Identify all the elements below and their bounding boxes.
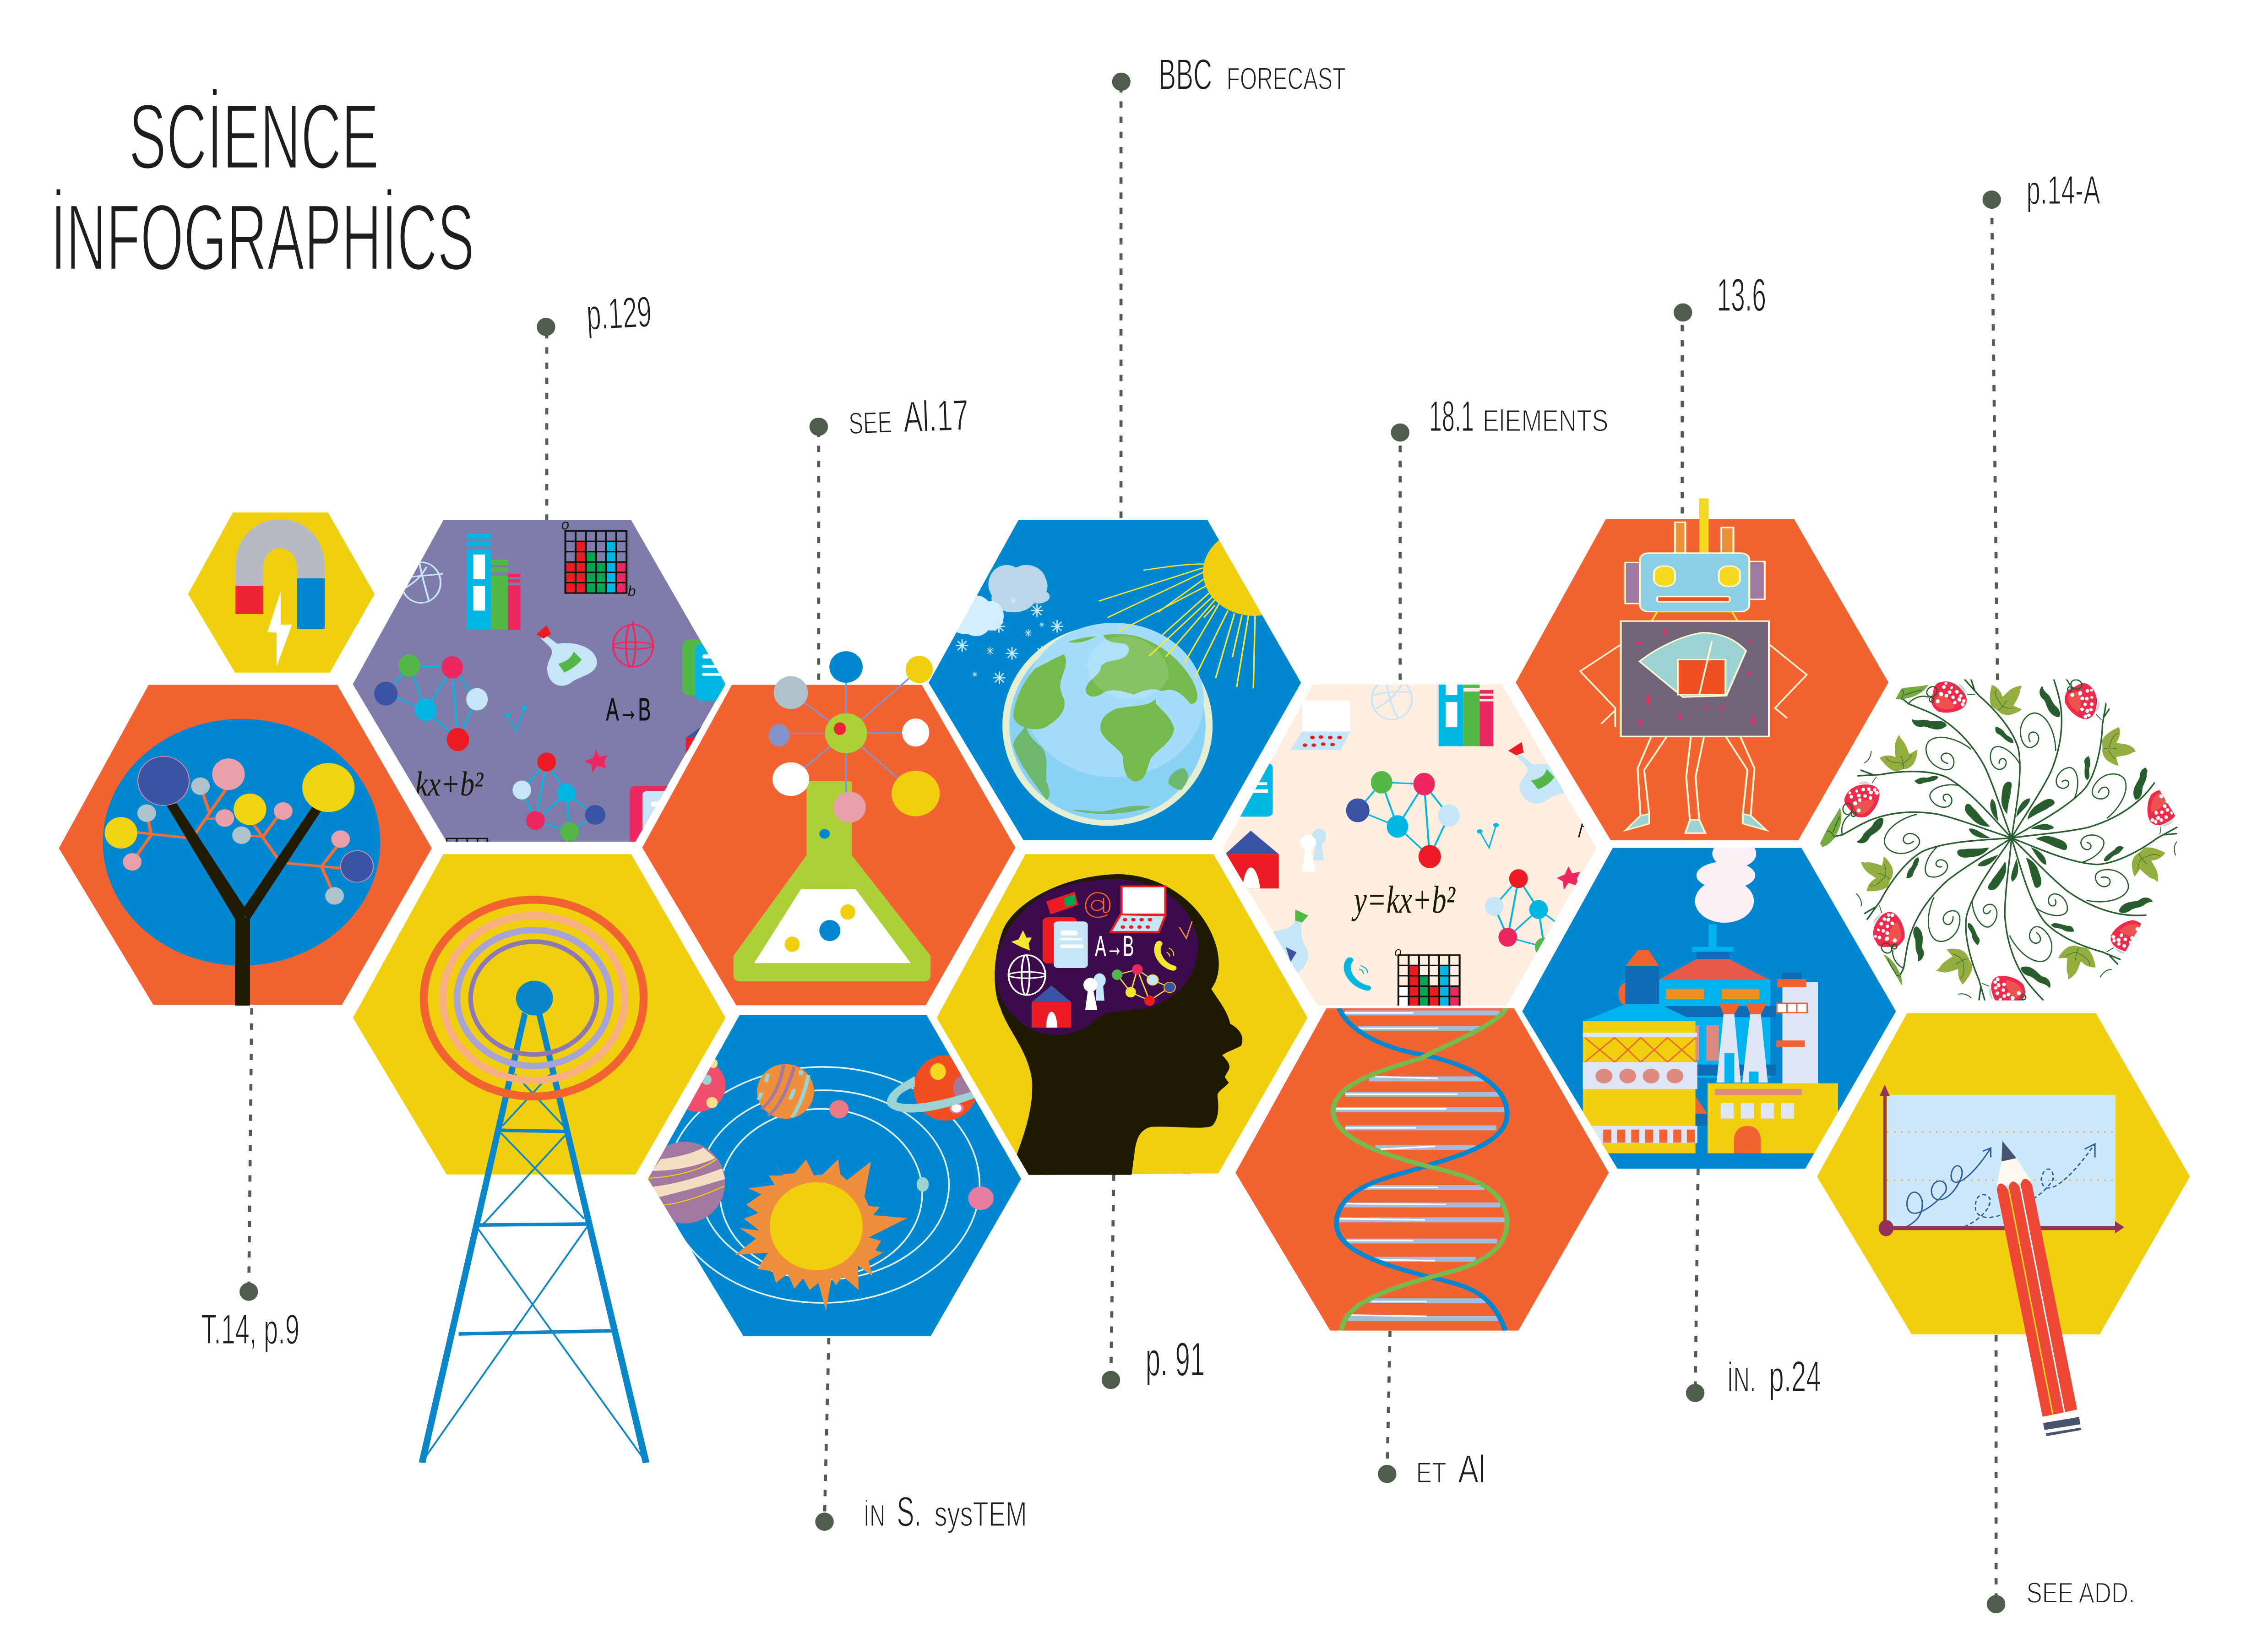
icon: small V [505,706,527,731]
icon: flask right [1508,742,1573,804]
callout: see al.17: Al.17 [903,391,969,441]
factory chimneys [1717,1003,1768,1083]
chart icon: grid [1398,955,1460,1006]
icon: V [1477,823,1499,848]
callout: et al [1378,1331,1485,1491]
chart curve dashed [1964,1144,2095,1227]
panel: magnet hexagon [188,512,375,673]
factory main building [1659,959,1776,1077]
callout: in. p.24: p.24 [1769,1353,1821,1401]
DNA rungs [1336,1013,1505,1318]
callout: in S. system: İN [864,1499,885,1533]
callout: in S. system: sysTEM [935,1495,1027,1534]
callout: see al.17: SEE [848,405,892,441]
icon: clouds [952,565,1050,636]
icon: tile green and cyan [682,639,737,701]
panel: tower hexagon [353,854,725,1463]
callout: 18.1 elements: 18.1 [1429,392,1474,441]
icon: light globe [401,562,443,603]
callout: et al: ET [1416,1457,1447,1489]
text: equation: y=kx+b² [1351,878,1456,921]
callout: BBC forecast: BBC [1158,50,1212,99]
callout: 18.1 elements [1391,392,1609,680]
panel: solar system hexagon [645,1015,1021,1336]
icon: phone [1158,943,1174,968]
icon: flask [536,625,597,686]
robot feet [1626,814,1767,833]
robot legs [1637,737,1754,821]
icon: small planets [829,1100,994,1210]
text: grid letters [561,516,636,599]
icon: globe [1008,955,1045,995]
icon: molecule [374,654,488,751]
callout: p. 91 [1102,1175,1205,1389]
factory left tower [1583,950,1696,1021]
fragment stroke [1579,823,1589,838]
icon: pencil [1997,1141,2081,1436]
panel: cream hexagon [1223,679,1597,1006]
fruit circles [105,756,373,904]
icon: chimney stack [1692,925,1733,963]
callout: in S. system [815,1338,1027,1535]
icon: V [1180,921,1192,938]
chart gridlines [1887,1132,2114,1180]
icon: atom links [779,667,919,807]
panel: purple formulas hexagon [353,516,737,845]
factory yellow block [1583,1021,1697,1153]
brain [996,879,1198,1035]
icon: star [1557,866,1580,890]
icon: earth [1006,623,1209,823]
callout: BBC forecast [1112,50,1346,518]
icon: tower head [516,981,553,1015]
icon: molecule second [512,752,605,841]
callout: p. 91: p. 91 [1146,1333,1205,1386]
icon: banded planet [645,1142,725,1224]
icon: flask lower [1273,909,1308,974]
icon: star [584,749,607,773]
callout: BBC forecast: FORECAST [1227,62,1346,96]
icon: sun [735,1159,908,1311]
callout: 18.1 elements: ElEMENTS [1483,404,1609,438]
text: letter o: o [1394,943,1402,959]
robot body [1621,621,1769,736]
icon: books [467,533,521,630]
icon: notes tile [1228,763,1273,816]
icon: laptop [1110,887,1165,932]
chart curve solid [1901,1148,1991,1229]
panel: head hexagon [937,854,1308,1175]
callout: p.14-A [1982,167,2100,680]
icon: radio tower [419,1012,649,1463]
panel: factory hexagon [1522,839,1896,1169]
orbits [666,1067,979,1303]
panel: chart hexagon [1817,1013,2190,1436]
bottom grid piece [446,838,487,842]
title: İNFOGRAPHİCS [51,185,474,290]
chart axes [1879,1085,2124,1236]
icon: at sign [1086,892,1110,917]
icon: lightning [267,591,292,667]
factory small annex [1696,1096,1707,1126]
icon: house piece [686,721,709,759]
factory front block [1708,1083,1838,1153]
robot head [1640,553,1749,612]
title: SCİENCE [129,85,379,188]
title [51,85,474,290]
text: A to B white: A→B [1095,930,1134,962]
panel: strawberry vines hexagon [1811,624,2229,1048]
icon: molecule second [1485,869,1568,957]
icon: snowflakes [956,596,1063,684]
callout: in. p.24 [1686,1169,1821,1402]
icon: phone [1347,960,1368,988]
icon: globe [1372,679,1412,719]
callout: p.129: p.129 [585,288,653,339]
icon: keyholes [1083,973,1106,1010]
text: grid letters: o [561,516,569,533]
tree trunk [166,803,321,1006]
DNA highlights [1336,1013,1458,1317]
callout: 13.6: 13.6 [1717,269,1766,321]
green strand [1333,1008,1507,1331]
icon: keyholes [1300,829,1326,872]
icon: molecule [1112,964,1175,1006]
icon: sun [1203,528,1305,616]
robot arms [1580,645,1807,727]
icon: house [1225,831,1279,888]
callout: 13.6 [1674,269,1766,513]
icon: phone tile [630,786,689,845]
icon: pink globe [613,621,653,667]
callout: p.129 [537,288,653,521]
callout: p.14-A: p.14-A [2026,167,2100,212]
callout: T.14, p.9 [201,1008,299,1353]
robot ears [1625,561,1765,604]
chart icon: grid [566,531,626,593]
chart arrow tip [2085,1144,2095,1157]
text: formula: kx+b² [415,765,484,803]
icon: notes tile [1043,917,1088,968]
panel: earth hexagon [929,520,1305,840]
callout: T.14, p.9: T.14, p.9 [201,1306,299,1353]
icon: smoke [1695,839,1756,923]
panel: DNA hexagon [1235,1008,1609,1331]
blue circle [103,719,381,966]
blue strand [1336,1008,1507,1331]
icon: laptop [1290,701,1350,750]
icon: star [1011,930,1032,951]
icon: atom nodes [768,651,940,822]
callout: see al.17 [810,391,969,680]
robot neck [1652,612,1738,621]
robot antennas [1675,498,1733,553]
panel: robot hexagon [1516,498,1888,840]
icon: signal rings [424,900,644,1096]
text: grid letters: b [628,582,636,599]
callout: in. p.24: İN. [1727,1360,1756,1399]
icon: device [1046,892,1078,914]
callout: et al: Al [1458,1448,1485,1491]
callout: see add.: SEE ADD. [2026,1577,2135,1609]
callout: in S. system: S. [897,1489,921,1535]
icon: striped planet [757,1064,814,1119]
icon: molecule [1346,771,1460,868]
icon: books [1439,685,1493,746]
head silhouette [995,874,1242,1175]
text: A to B: A→B [606,691,651,727]
factory right tower [1776,973,1818,1084]
chart area [1887,1095,2116,1227]
icon: ringed planet [887,1055,978,1121]
branches [132,786,341,896]
icon: flask [734,781,930,981]
icon: house [1032,985,1071,1028]
icon: pink planet [670,1059,726,1112]
panel: tree hexagon [59,685,432,1006]
icon: magnet [235,519,325,629]
callout: see add. [1987,1335,2135,1613]
icon: sun rays [1099,564,1255,688]
panel: flask hexagon [642,651,1015,1005]
